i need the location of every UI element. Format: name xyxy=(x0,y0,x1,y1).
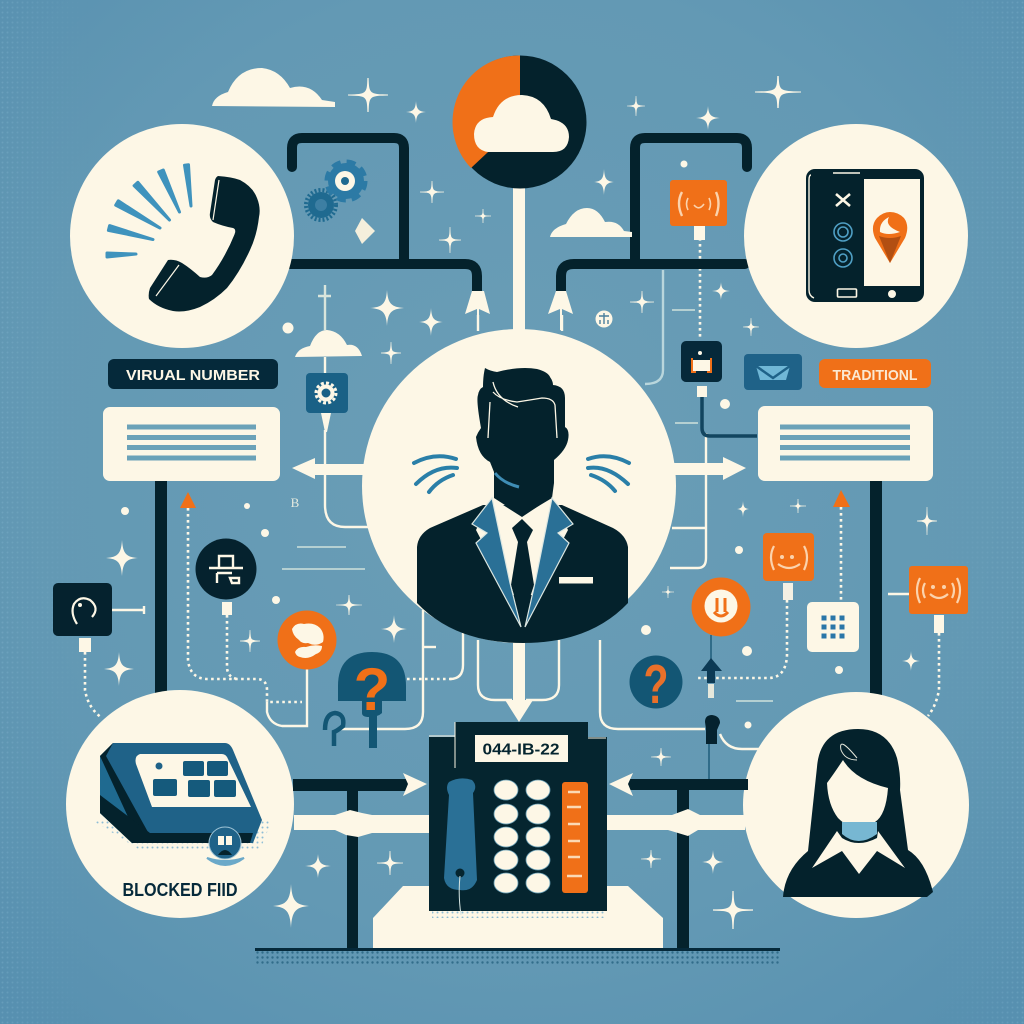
badge: orange signal right xyxy=(909,566,968,633)
main dark connector: left xyxy=(290,138,477,291)
headset mic xyxy=(495,473,519,487)
icon: question dome xyxy=(338,652,406,748)
icon: dark circle symbol xyxy=(196,538,256,615)
icon: orange alert ball xyxy=(692,578,750,636)
base platform xyxy=(373,886,663,948)
circle: agent xyxy=(362,329,676,643)
keypad buttons xyxy=(494,780,550,893)
icon: tablet device xyxy=(806,169,924,302)
cloud: top left xyxy=(212,68,335,107)
circle: blocked caller xyxy=(66,690,294,918)
icon: sound rays xyxy=(107,165,191,257)
cloud: small left xyxy=(295,330,362,357)
face xyxy=(827,760,888,828)
orange panel xyxy=(562,782,588,893)
pocket square xyxy=(559,577,593,584)
cloud: right xyxy=(550,208,632,237)
icon: profile badge xyxy=(207,827,244,865)
posts xyxy=(155,481,882,696)
tie xyxy=(511,519,534,622)
text box: right xyxy=(758,406,933,481)
halftone shadow xyxy=(92,820,272,850)
phone number: 044-IB-22 xyxy=(482,742,560,758)
lapels xyxy=(472,498,573,627)
icon: left dark badge xyxy=(53,583,112,652)
main dark connector: right xyxy=(561,138,747,291)
arrow: left to center xyxy=(465,291,490,330)
center arrow: right xyxy=(672,457,746,480)
icon: desk phone xyxy=(100,743,262,843)
orange triangle: right xyxy=(833,490,850,507)
dotted connector lines xyxy=(85,226,939,718)
arrows and beams: right to phone xyxy=(605,773,748,950)
stem and arrow: center to phone xyxy=(505,640,533,722)
sound waves: right xyxy=(588,456,629,491)
icon: map pin xyxy=(873,212,907,263)
phone number xyxy=(475,735,568,762)
label: traditional xyxy=(819,359,931,388)
icon: gear box xyxy=(306,373,348,432)
collar xyxy=(812,831,905,874)
hair highlight xyxy=(841,744,857,760)
letter B: B xyxy=(291,495,300,510)
badge: orange signal top xyxy=(670,180,727,240)
label: traditional: TRADITIONL xyxy=(832,367,918,384)
sound waves: left xyxy=(414,456,457,492)
icon: question circle xyxy=(630,653,682,715)
icon: small question hook xyxy=(325,713,343,746)
sparkles and dots xyxy=(104,76,937,929)
small seal icon xyxy=(596,310,612,328)
icon: cloud pie xyxy=(453,55,586,189)
icon: keypad square xyxy=(807,602,859,652)
hair highlights xyxy=(488,382,557,438)
label: blocked: BLOCKED FIID xyxy=(122,880,238,900)
text box: left xyxy=(103,407,280,481)
icon: desk phone xyxy=(429,722,607,915)
icon: gears xyxy=(306,162,375,244)
icon: question dome: ? xyxy=(354,656,390,723)
icon: question circle: ? xyxy=(644,653,668,715)
thin connector lines xyxy=(112,270,909,749)
head silhouette xyxy=(476,368,569,516)
plug with up arrow xyxy=(701,635,722,782)
label: virtual number xyxy=(108,359,278,389)
hair and body xyxy=(783,729,933,897)
icon: handset xyxy=(149,176,260,312)
icon: orange map ball xyxy=(278,610,336,670)
icon: envelope xyxy=(744,354,802,390)
circle: woman xyxy=(743,692,969,918)
shirt xyxy=(476,497,568,595)
orange triangle: left xyxy=(180,492,196,508)
arrows and beams: left to phone xyxy=(293,773,432,950)
handset xyxy=(444,778,477,890)
suit xyxy=(417,505,628,643)
icon: dark profile box xyxy=(681,341,757,436)
floor line xyxy=(255,948,780,951)
center arrow: left xyxy=(292,458,365,479)
label: virtual number: VIRUAL NUMBER xyxy=(126,367,260,384)
neck xyxy=(842,822,877,841)
circle: tablet xyxy=(744,124,968,348)
stem: cloud to center xyxy=(513,186,525,332)
badge: orange signal mid xyxy=(763,533,814,600)
arrow: right to center xyxy=(548,291,573,330)
circle: virtual number handset xyxy=(70,124,294,348)
